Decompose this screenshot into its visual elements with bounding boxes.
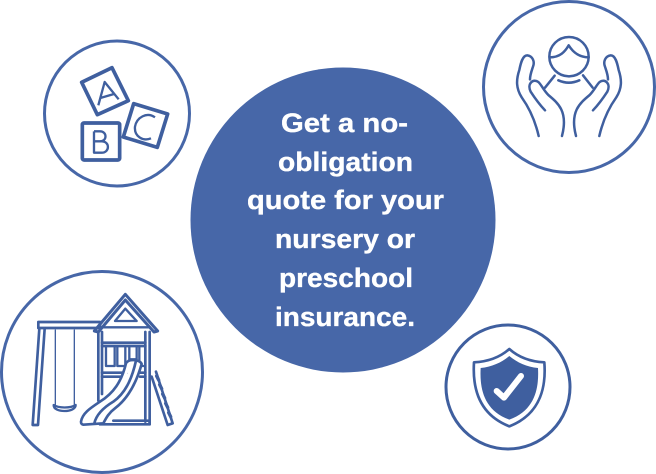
quote text: quote for your [247,185,444,215]
block B [82,123,120,160]
quote text: Get a no- [281,108,408,138]
check mark [497,376,521,398]
shield fill [481,356,538,420]
child head [545,37,593,88]
icon: alphabet blocks circle [44,41,190,186]
icon: shield circle [446,325,570,449]
ladder [152,372,173,425]
block A [82,68,128,115]
icon: hands around child circle [484,2,654,172]
slide [81,360,142,425]
quote text: insurance. [275,302,415,332]
swing frame [33,322,100,425]
shield outline [474,349,545,426]
icon: playground circle [2,272,202,472]
right hand [574,55,621,136]
central quote circle [190,68,496,372]
quote text: obligation [278,147,413,177]
left hand [517,55,564,136]
playhouse frame [98,332,150,424]
swing [54,330,76,411]
quote text: preschool [279,263,413,293]
block C [123,104,168,147]
quote text [247,108,444,332]
quote text: nursery or [275,224,415,254]
playhouse roof [94,294,158,332]
